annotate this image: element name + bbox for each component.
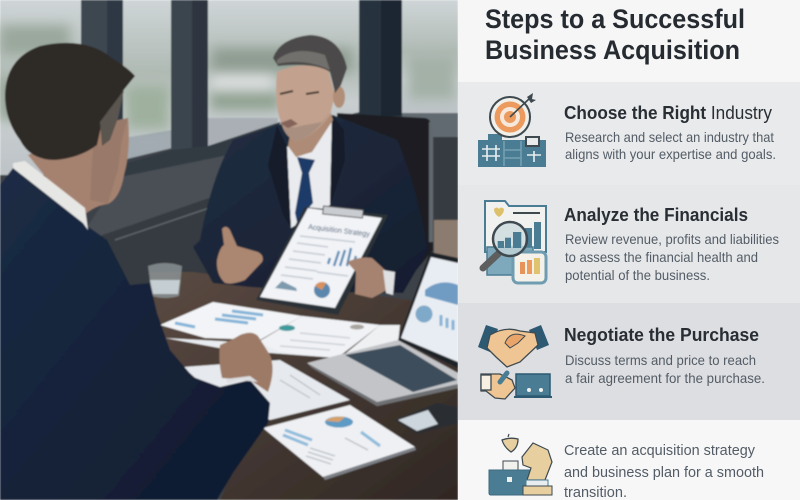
heading: Negotiate the Purchase (564, 325, 759, 345)
description: Discuss terms and price to reach (565, 352, 756, 368)
description (564, 442, 764, 500)
description: Create an acquisition strategy (564, 442, 755, 459)
title: Business Acquisition (485, 35, 740, 65)
shirt and collar (287, 117, 332, 228)
photo: business meeting (0, 0, 458, 500)
description: aligns with your expertise and goals. (565, 146, 776, 162)
neck and cheek (28, 118, 129, 215)
man on the left (0, 43, 270, 500)
clipboard: acquisition strategy: Acquisition Strategy (308, 222, 371, 239)
description: and business plan for a smooth (564, 464, 764, 481)
neck and face (288, 110, 333, 157)
step 4: acquisition strategy (458, 420, 800, 500)
title: Steps to a Successful (485, 4, 745, 34)
clipboard: acquisition strategy (256, 206, 388, 315)
man on the right (193, 35, 428, 293)
laptop (307, 252, 458, 406)
window frames (81, 0, 402, 178)
heading: Choose the Right Industry (564, 103, 772, 123)
table (150, 272, 458, 500)
description (565, 352, 765, 386)
step 3: negotiate the purchase (458, 303, 800, 420)
hand holding clipboard (347, 258, 387, 298)
icon: target and buildings (478, 93, 546, 167)
description: Research and select an industry that (565, 129, 774, 145)
description (565, 129, 776, 162)
step 2: analyze the financials (458, 185, 800, 303)
description (565, 231, 779, 283)
description: a fair agreement for the purchase. (565, 370, 765, 386)
window city view (0, 0, 458, 175)
hair (5, 43, 135, 160)
icon: documents, chart and magnifier (483, 201, 546, 283)
step 1: choose the right industry (458, 82, 800, 185)
heading: Analyze the Financials (564, 205, 748, 225)
suit (0, 168, 270, 500)
lower documents (183, 360, 416, 480)
documents on the table (160, 302, 400, 360)
description: Review revenue, profits and liabilities (565, 231, 779, 247)
description: to assess the financial health and (565, 249, 758, 265)
chair (337, 113, 433, 290)
water glass (148, 263, 182, 298)
window sill and wall (84, 113, 458, 300)
icon: handshakes and laptop (478, 325, 552, 399)
phone (395, 403, 458, 434)
icon: briefcase and chess knight (489, 434, 552, 495)
tie (295, 157, 315, 222)
clasped hands (219, 333, 273, 392)
sidebar panel (458, 0, 800, 500)
hand gesturing (217, 227, 263, 284)
description: potential of the business. (565, 267, 710, 283)
title (485, 4, 745, 65)
